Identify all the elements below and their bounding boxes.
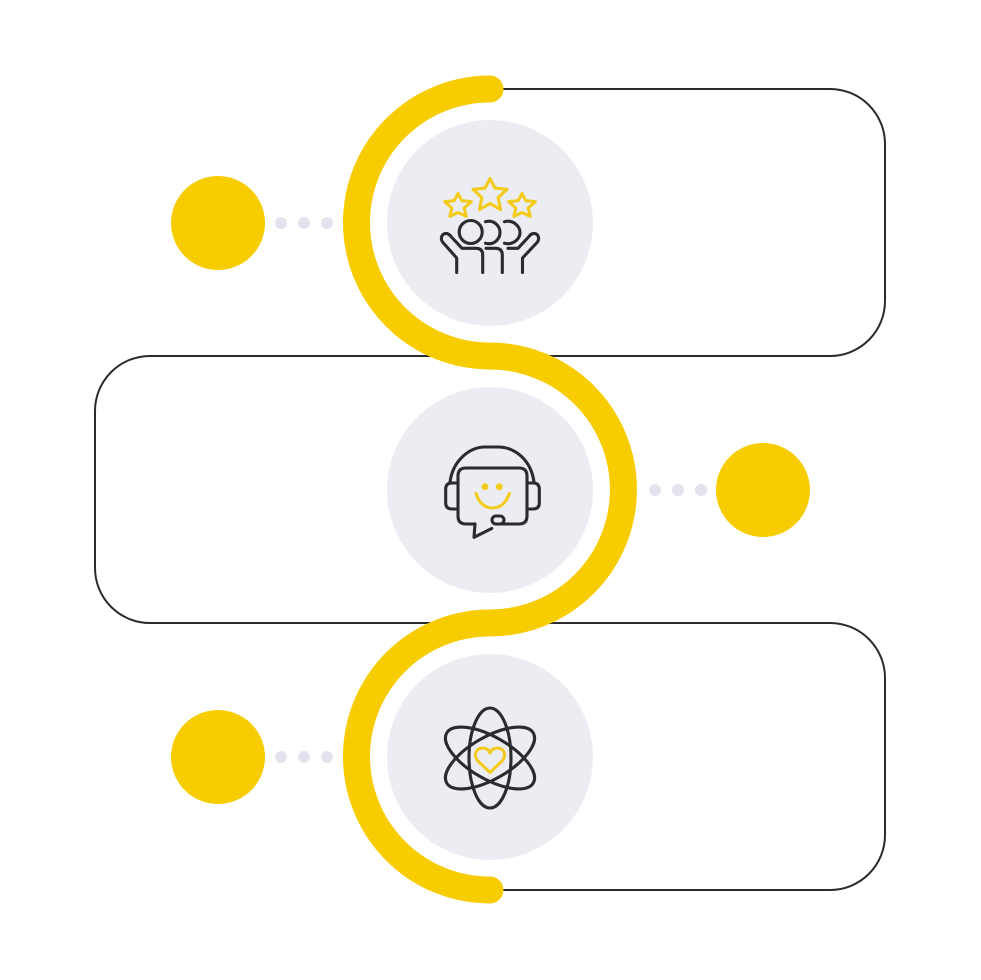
marker circle: middle <box>716 443 810 537</box>
icon: headset speech bubble with smile <box>446 447 539 537</box>
panel: bottom outline box <box>490 623 885 890</box>
yellow serpentine connector <box>356 89 623 890</box>
marker circle: top <box>171 176 265 270</box>
dotted connector: top <box>275 217 333 229</box>
icon disc: middle <box>387 387 593 593</box>
icon: team with three stars <box>441 178 539 272</box>
icon disc: top <box>387 120 593 326</box>
marker circle: bottom <box>171 710 265 804</box>
dotted connector: bottom <box>275 751 333 763</box>
panel: top outline box <box>490 89 885 356</box>
people <box>441 220 539 272</box>
stars <box>445 178 535 216</box>
icon disc: bottom <box>387 654 593 860</box>
dotted connector: middle <box>649 484 707 496</box>
icon: atom with heart <box>436 708 544 808</box>
panel: middle outline box <box>95 356 490 623</box>
